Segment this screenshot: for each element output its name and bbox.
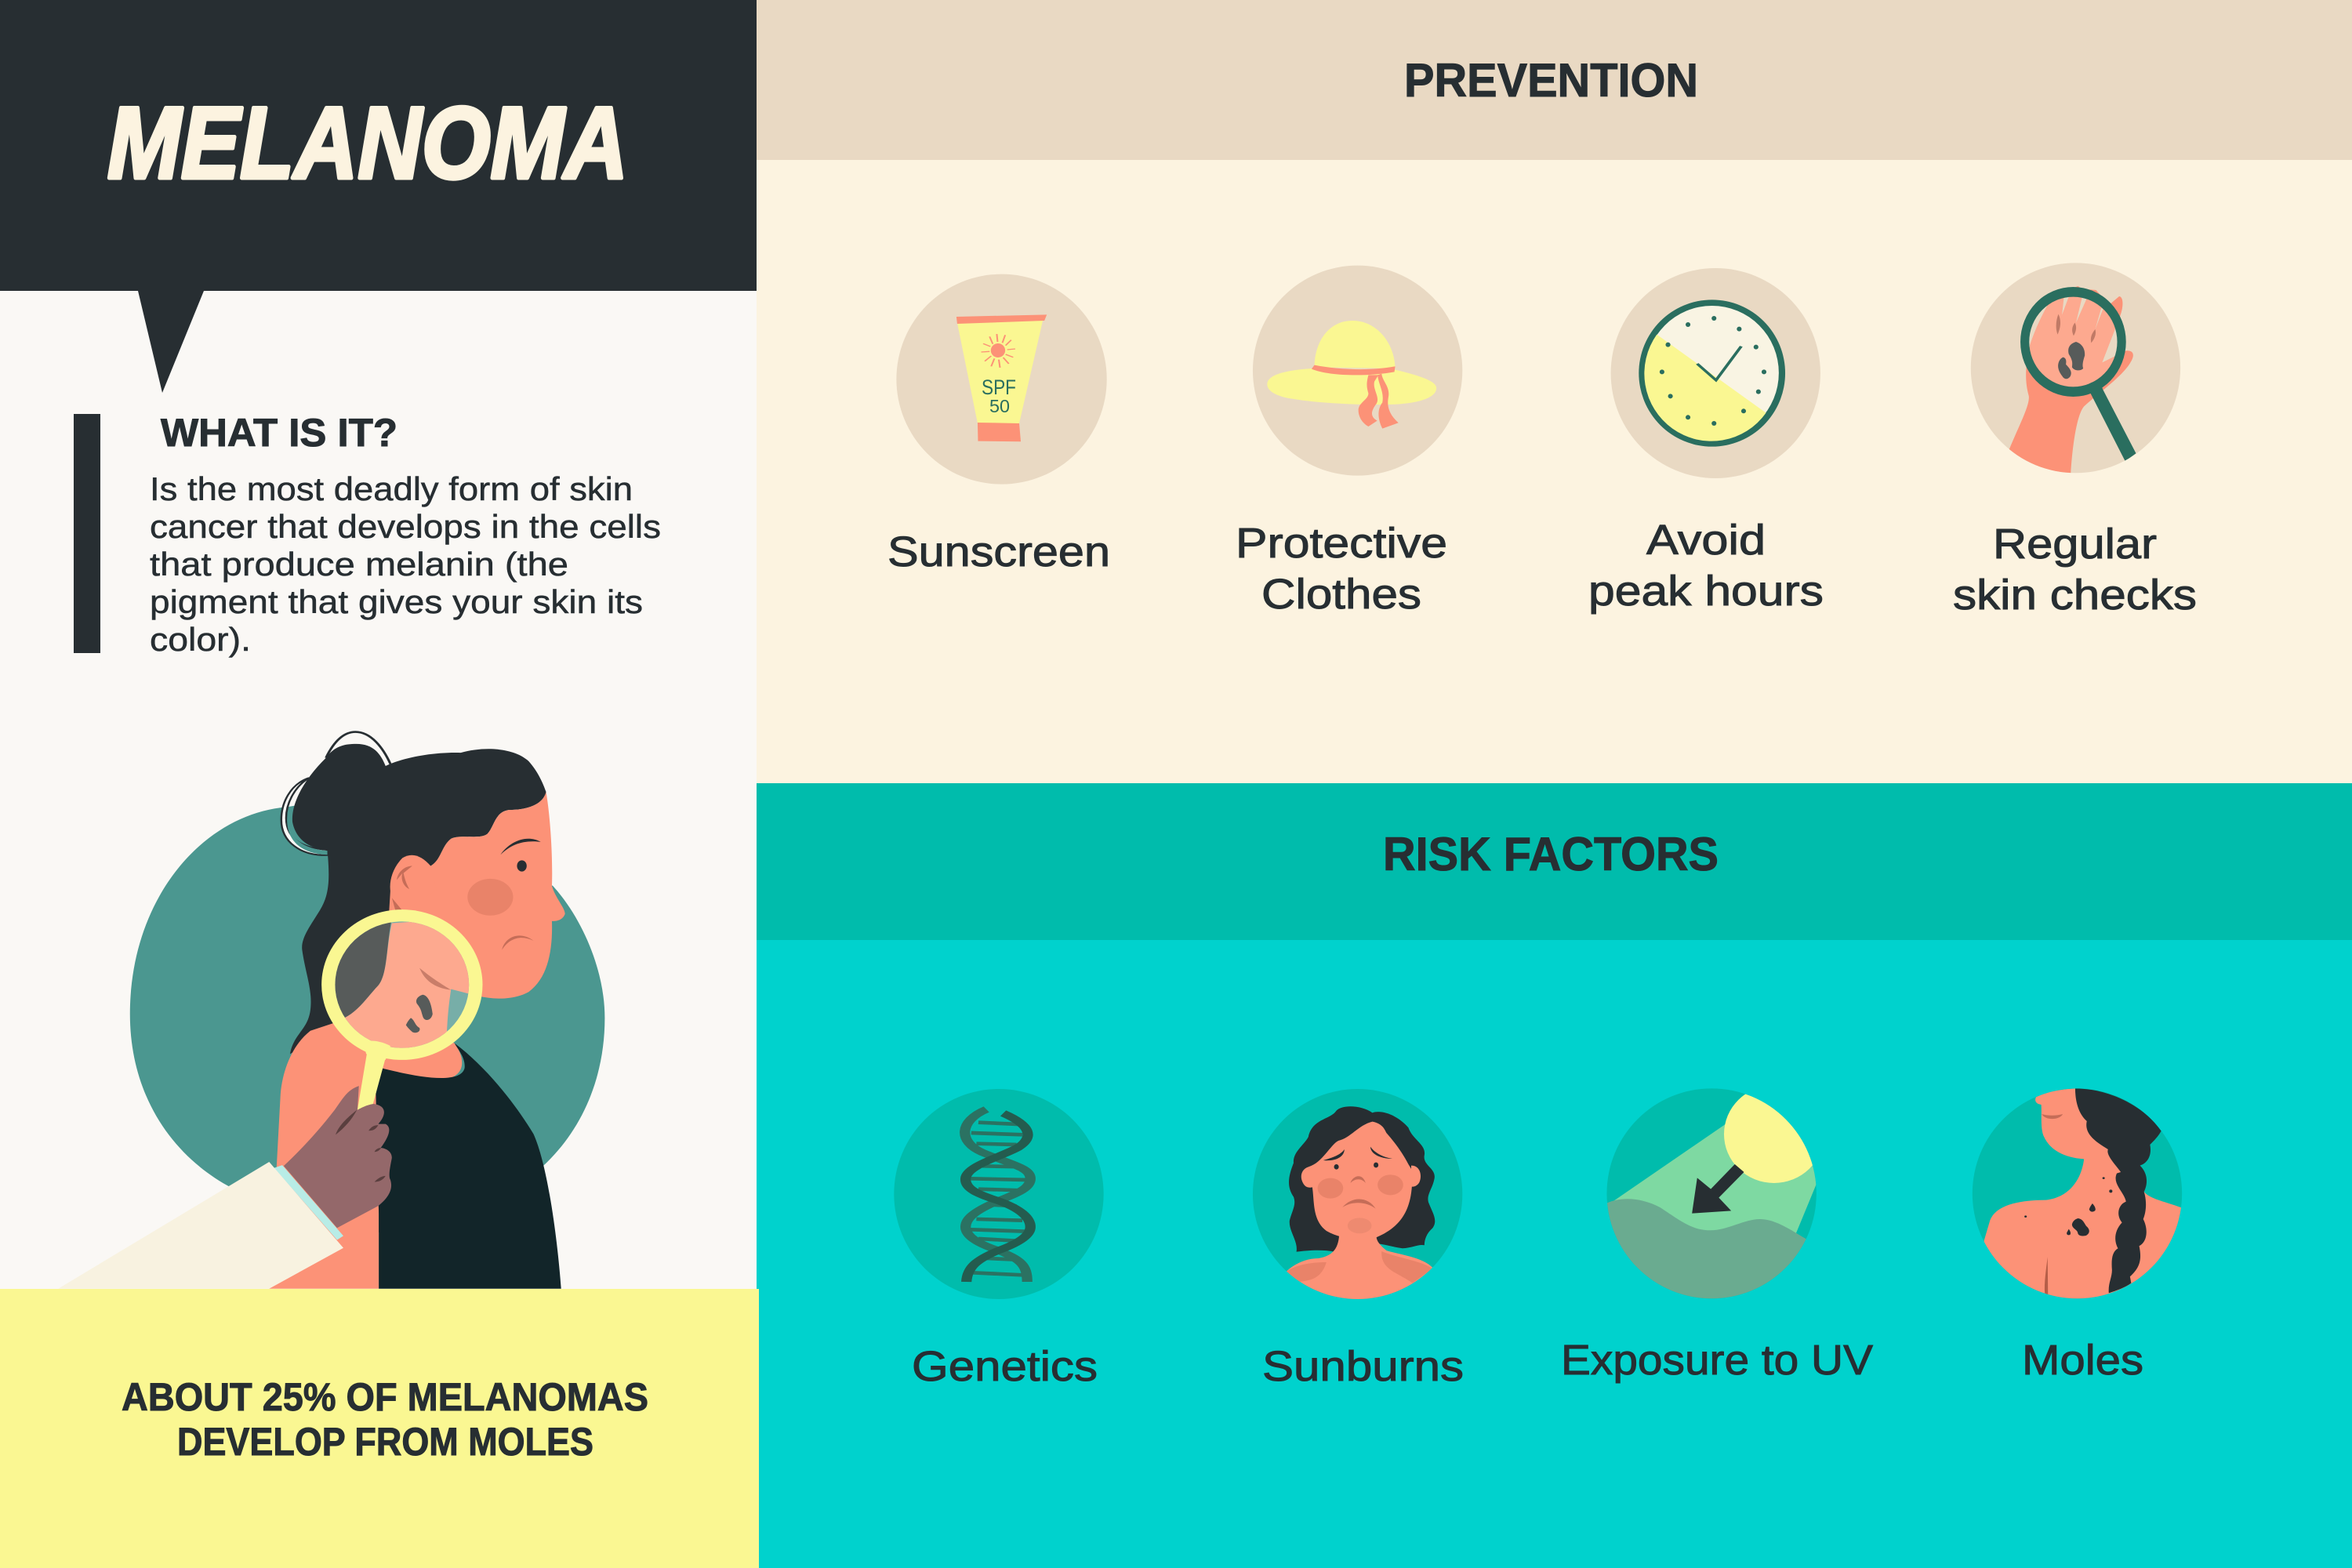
panel: risk factors — [757, 783, 2352, 1568]
description: cancer that develops in the cells — [150, 508, 661, 545]
icon: clock — [1611, 268, 1820, 478]
icon: sunscreen: SPF — [982, 376, 1016, 399]
callout: moles statistic: ABOUT 25% OF MELANOMAS — [122, 1375, 648, 1419]
title: MELANOMA — [107, 85, 628, 200]
label: moles: Moles — [2022, 1337, 2143, 1384]
label: protective clothes — [1236, 520, 1447, 618]
label: protective clothes: Protective — [1236, 520, 1447, 567]
icon: hat — [1253, 266, 1462, 476]
label: sunburns: Sunburns — [1262, 1343, 1464, 1390]
title banner — [0, 0, 757, 393]
label: genetics: Genetics — [912, 1343, 1098, 1390]
description — [150, 470, 661, 658]
label: protective clothes: Clothes — [1261, 571, 1421, 618]
icon: dna — [894, 1089, 1104, 1299]
icon: exposure to uv — [1606, 1085, 1824, 1301]
heading: what is it: WHAT IS IT? — [161, 411, 397, 455]
description: pigment that gives your skin its — [150, 583, 643, 620]
label: sunscreen: Sunscreen — [887, 528, 1110, 575]
hand — [274, 1086, 392, 1240]
label: avoid peak hours — [1588, 517, 1824, 615]
icon: skin check — [1971, 263, 2180, 473]
label: avoid peak hours: peak hours — [1588, 568, 1824, 615]
icon: moles — [1973, 1088, 2184, 1301]
icon: sunscreen — [896, 274, 1107, 485]
panel: prevention — [757, 0, 2352, 783]
label: regular skin checks: Regular — [1993, 521, 2157, 568]
icon: sunscreen: 50 — [989, 396, 1010, 416]
magnifying glass — [321, 909, 483, 1110]
heading: prevention: PREVENTION — [1404, 54, 1698, 107]
text block: what is it — [74, 411, 661, 658]
description: color). — [150, 621, 251, 658]
heading: risk factors: RISK FACTORS — [1383, 828, 1719, 880]
label: avoid peak hours: Avoid — [1646, 517, 1766, 564]
illustration: woman examined with magnifying glass — [58, 732, 604, 1289]
coat sleeve — [58, 1162, 343, 1289]
description: that produce melanin (the — [150, 546, 568, 583]
callout: moles statistic — [0, 1289, 759, 1568]
description: Is the most deadly form of skin — [150, 470, 633, 507]
icon: sunburns — [1253, 1089, 1462, 1301]
label: regular skin checks: skin checks — [1953, 572, 2197, 619]
label: regular skin checks — [1953, 521, 2197, 619]
label: exposure to uv: Exposure to UV — [1561, 1337, 1873, 1384]
callout: moles statistic: DEVELOP FROM MOLES — [177, 1420, 593, 1464]
